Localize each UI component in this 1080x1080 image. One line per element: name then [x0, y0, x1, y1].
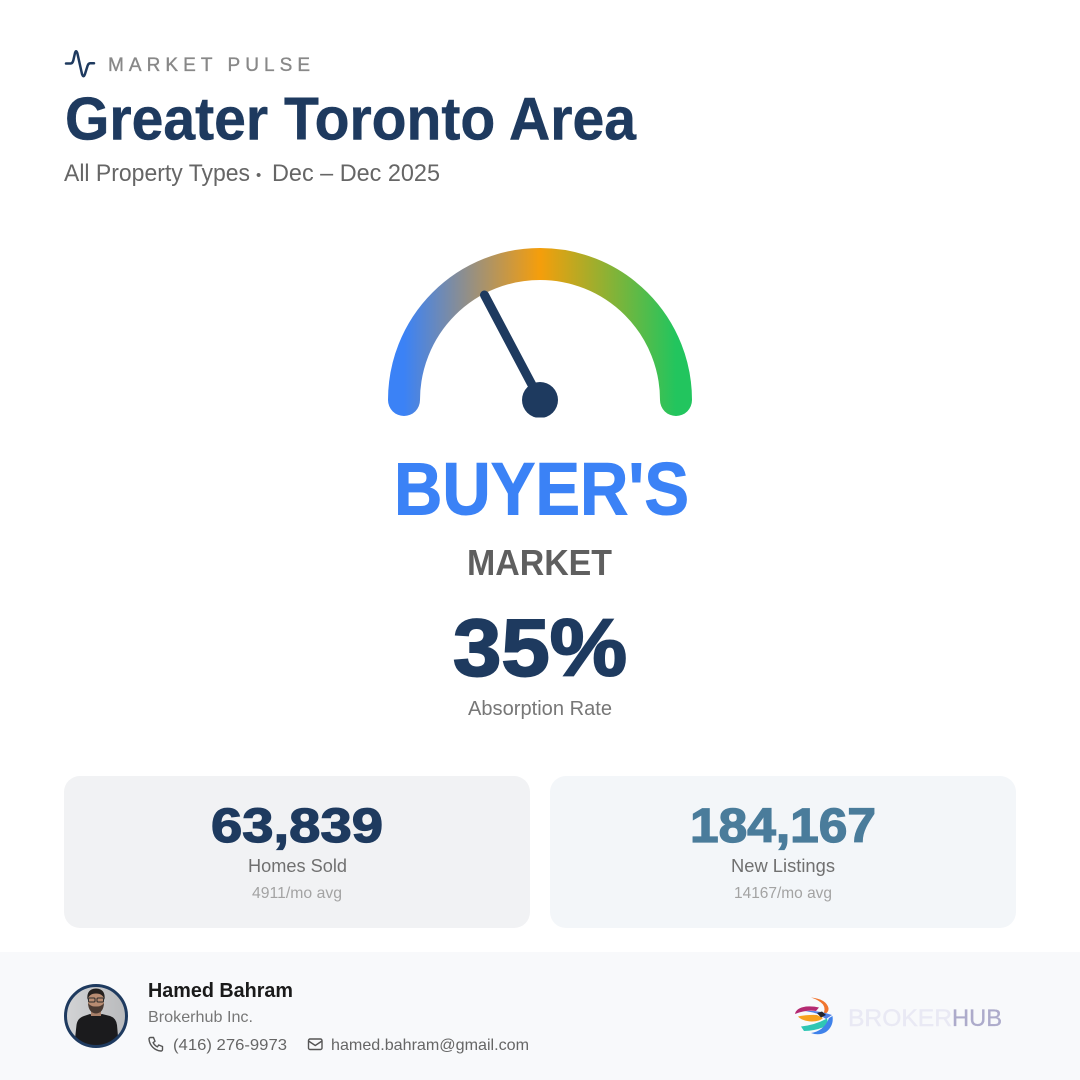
agent photo: [66, 986, 126, 1048]
homes sold label: Homes Sold: [248, 856, 347, 876]
logo mark: [795, 998, 833, 1034]
icon: mail: [308, 1039, 322, 1050]
market status: [394, 448, 689, 720]
homes sold average: 4911/mo avg: [252, 885, 342, 902]
phone number: (416) 276-9973: [173, 1037, 287, 1054]
absorption value: 35%: [453, 604, 627, 694]
panel: new listings: [550, 776, 1016, 928]
header: [64, 51, 637, 187]
new listings value: 184,167: [690, 800, 876, 853]
logo wordmark: [848, 1005, 1002, 1032]
needle: [484, 295, 558, 418]
new listings average: 14167/mo avg: [734, 885, 832, 902]
status word: BUYER'S: [394, 448, 689, 530]
subtitle: [64, 160, 440, 187]
icon: pulse: [66, 51, 94, 76]
logo wordmark: HUB: [952, 1005, 1002, 1032]
status sublabel: MARKET: [467, 542, 612, 583]
homes sold value: 63,839: [211, 800, 383, 853]
panel: homes sold: [64, 776, 530, 928]
new listings label: New Listings: [731, 856, 835, 876]
logo: [795, 998, 1002, 1034]
absorption label: Absorption Rate: [468, 698, 612, 720]
eyebrow label: MARKET PULSE: [108, 55, 310, 76]
title: Greater Toronto Area: [65, 86, 637, 152]
gauge: [404, 264, 676, 418]
subtitle: •: [256, 167, 261, 184]
icon: phone: [149, 1038, 163, 1051]
subtitle: All Property Types: [64, 160, 250, 187]
email: hamed.bahram@gmail.com: [331, 1037, 529, 1054]
logo wordmark: BROKER: [848, 1005, 952, 1032]
gauge arc: [404, 264, 676, 400]
agent name: Hamed Bahram: [148, 980, 293, 1002]
company: Brokerhub Inc.: [148, 1009, 253, 1026]
subtitle: Dec – Dec 2025: [272, 160, 440, 187]
footer: [64, 982, 1001, 1054]
